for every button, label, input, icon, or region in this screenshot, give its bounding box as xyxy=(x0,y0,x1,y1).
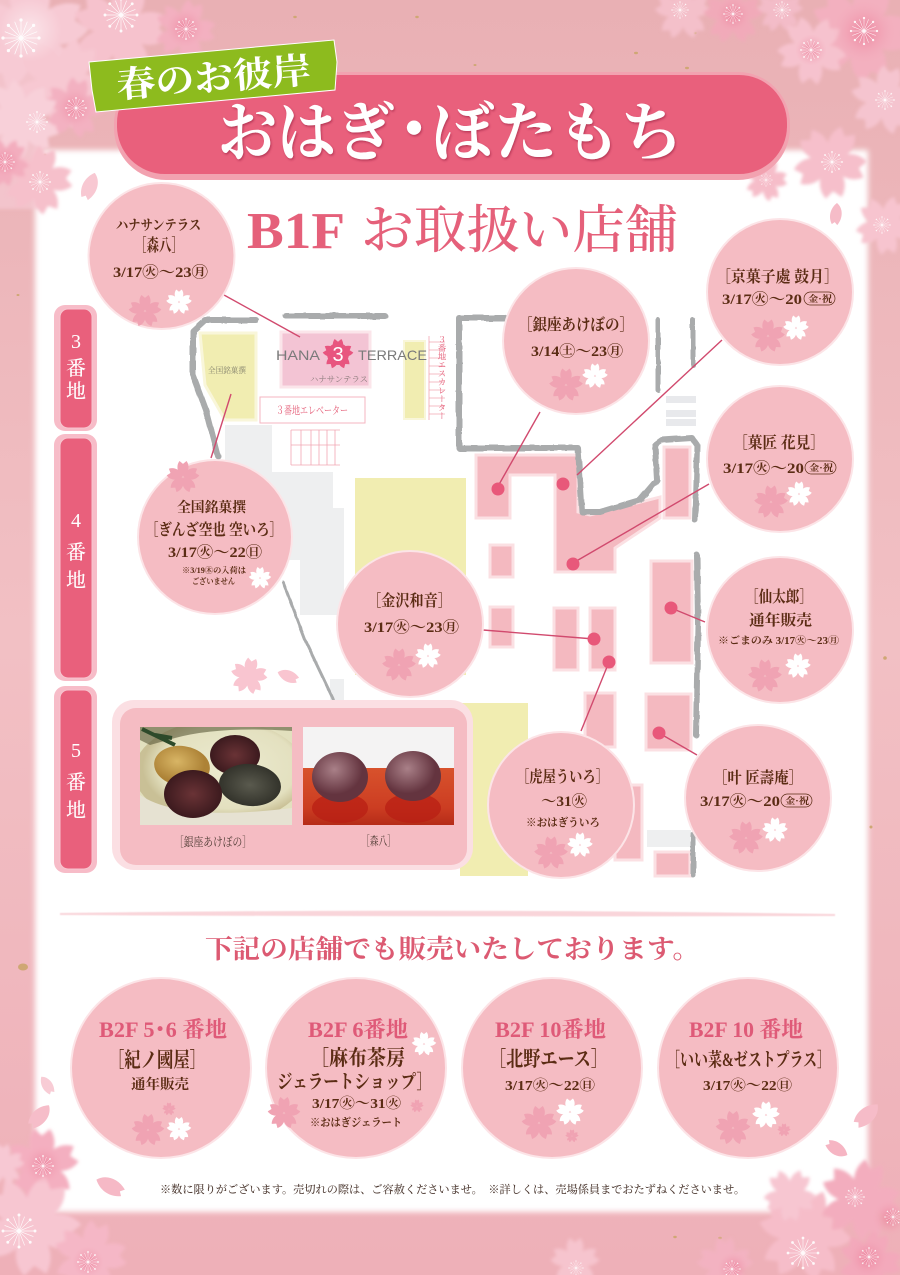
green tag: spring ohigan xyxy=(89,40,337,112)
store: Toraya Uiro xyxy=(487,731,635,879)
Hana Terrace logo xyxy=(276,339,427,384)
store: Sentaro: ［仙太郎］ xyxy=(745,588,813,606)
area tab: 5 banchi xyxy=(54,686,97,873)
footer note: ※数に限りがございます。売切れの際は、ご容赦くださいませ。 ※詳しくは、売場係員までおたずねくださいませ。 xyxy=(160,1182,745,1196)
photo: Moripachi ohagi xyxy=(303,727,454,825)
store: Ginza Akebono: 3/14㊏～23㊊ xyxy=(531,343,623,360)
area tab: 3 banchi: 番 xyxy=(66,357,86,380)
store: Azabu Saryo Gelato Shop: ジェラートショップ］ xyxy=(277,1071,432,1093)
store: Kasho Hanami: ［菓匠 花見］ xyxy=(733,433,825,452)
main title text: ぼたもち xyxy=(432,98,683,169)
store: Kitano Ace: 3/17㊋～22㊐ xyxy=(505,1078,595,1094)
store: Moripachi: ［森八］ xyxy=(134,235,184,255)
main title text xyxy=(218,95,683,169)
store: Kanazawa Wao: ［金沢和音］ xyxy=(367,591,452,610)
photo: Ginza Akebono ohagi xyxy=(140,727,292,825)
area tab: 3 banchi: 地 xyxy=(66,380,86,403)
store: Ginza Kuya Sorairo: ございません xyxy=(192,576,235,586)
store: Kano Shojuan: 金·祝 xyxy=(785,795,809,806)
bottom-right cherry blossom cluster xyxy=(550,1099,900,1275)
heading: B1F stores: お取扱い店舗 xyxy=(361,203,678,260)
store: Azabu Saryo Gelato Shop: ※おはぎジェラート xyxy=(310,1115,402,1129)
store: Moripachi: 3/17㊋～23㊊ xyxy=(113,264,208,281)
main title text: ・ xyxy=(382,95,446,166)
title banner xyxy=(114,72,790,180)
label: elevator xyxy=(260,397,365,423)
store: Sentaro: ※ごまのみ 3/17㊋～23㊊ xyxy=(718,635,839,647)
store: Kano Shojuan: ［叶 匠壽庵］ xyxy=(713,768,803,787)
store: Iina and Zest Plus: ［いい菜&ゼストプラス］ xyxy=(666,1049,831,1071)
store: Kasho Hanami: 金·祝 xyxy=(809,462,833,473)
store: Toraya Uiro: ～31㊋ xyxy=(541,793,587,810)
area tab: 3 banchi xyxy=(54,305,97,431)
store: Kinokuniya xyxy=(70,977,252,1159)
white content panel xyxy=(35,150,868,1212)
photo panel xyxy=(112,700,473,870)
petals on map xyxy=(227,655,300,697)
area tab: 3 banchi: 3 xyxy=(71,331,81,353)
store: Kinokuniya: B2F 5･6 番地 xyxy=(99,1017,227,1042)
store: Iina and Zest Plus: B2F 10 番地 xyxy=(689,1017,803,1042)
heading: also sold at: 下記の店舗でも販売いたしております。 xyxy=(205,935,700,964)
area tab: 4 banchi xyxy=(54,434,97,681)
store: Ginza Kuya Sorairo: ［ぎんざ空也 空いろ］ xyxy=(145,520,283,539)
area tab: 4 banchi: 地 xyxy=(66,569,86,592)
divider band xyxy=(60,911,835,916)
store: Iina and Zest Plus xyxy=(657,977,839,1159)
store: Ginza Akebono: ［銀座あけぼの］ xyxy=(518,315,634,334)
top-left cherry blossom cluster xyxy=(0,0,225,223)
store: Kyogashidokoro Tsuzumizuki: 3/17㊋～20 xyxy=(722,291,802,308)
Hana Terrace logo: ハナサンテラス xyxy=(310,375,368,384)
store: Iina and Zest Plus: 3/17㊋～22㊐ xyxy=(703,1078,792,1094)
store: Ginza Akebono xyxy=(502,267,650,415)
store: Kitano Ace xyxy=(461,977,643,1159)
store: Ginza Kuya Sorairo xyxy=(137,459,293,615)
store: Azabu Saryo Gelato Shop: 3/17㊋～31㊋ xyxy=(312,1096,401,1112)
store: Moripachi xyxy=(88,182,236,330)
store: Toraya Uiro: ※おはぎういろ xyxy=(526,815,600,829)
store: Ginza Kuya Sorairo: 全国銘菓撰 xyxy=(177,499,247,516)
label: zenkoku meika: 全国銘菓撰 xyxy=(208,365,246,375)
bottom-left cherry blossom cluster xyxy=(0,1074,136,1275)
label: escalator: ３番地エスカレーター xyxy=(437,335,447,420)
store: Azabu Saryo Gelato Shop xyxy=(265,977,447,1159)
store: Kitano Ace: B2F 10番地 xyxy=(495,1017,606,1042)
store: Sentaro xyxy=(706,556,854,704)
store: Kasho Hanami: 3/17㊋～20 xyxy=(723,460,804,477)
leader lines and store dots xyxy=(211,295,722,755)
store: Kyogashidokoro Tsuzumizuki: 金·祝 xyxy=(808,293,832,304)
store: Kyogashidokoro Tsuzumizuki: ［京菓子處 鼓月］ xyxy=(716,267,839,286)
caption: Moripachi: ［森八］ xyxy=(361,833,396,848)
store: Kinokuniya: 通年販売 xyxy=(131,1076,189,1093)
store: Ginza Kuya Sorairo: 3/17㊋～22㊐ xyxy=(168,544,262,561)
area tab: 4 banchi: 4 xyxy=(71,510,81,532)
store: Azabu Saryo Gelato Shop: ［麻布茶房 xyxy=(310,1046,405,1070)
green tag: spring ohigan: 春のお彼岸 xyxy=(115,50,313,106)
area tab: 5 banchi: 番 xyxy=(66,771,86,794)
area tab: 4 banchi: 番 xyxy=(66,541,86,564)
Hana Terrace logo: HANA xyxy=(276,347,321,363)
store: Toraya Uiro: ［虎屋ういろ］ xyxy=(516,767,609,786)
area tab: 5 banchi: 地 xyxy=(66,799,86,822)
top-right cherry blossom cluster xyxy=(654,0,900,266)
store: Kanazawa Wao xyxy=(336,550,484,698)
heading: B1F stores: B1F xyxy=(247,203,345,260)
Hana Terrace logo: 3 xyxy=(332,344,344,366)
caption: Ginza Akebono: ［銀座あけぼの］ xyxy=(174,835,252,849)
store: Sentaro: 通年販売 xyxy=(749,611,812,629)
main title text: おはぎ xyxy=(218,98,395,169)
store: Kasho Hanami xyxy=(706,385,854,533)
area tab: 5 banchi: 5 xyxy=(71,740,81,762)
store: Kinokuniya: ［紀ノ國屋］ xyxy=(108,1048,206,1072)
store: Kano Shojuan xyxy=(684,724,832,872)
store: Kyogashidokoro Tsuzumizuki xyxy=(706,218,854,366)
Hana Terrace logo: TERRACE xyxy=(358,347,427,363)
store: Kano Shojuan: 3/17㊋～20 xyxy=(700,793,780,810)
floor map xyxy=(193,316,698,876)
store: Azabu Saryo Gelato Shop: B2F 6番地 xyxy=(308,1017,408,1042)
store: Kitano Ace: ［北野エース］ xyxy=(489,1047,608,1071)
store: Kanazawa Wao: 3/17㊋～23㊊ xyxy=(364,619,459,636)
store: Ginza Kuya Sorairo: ※3/19㊍の入荷は xyxy=(182,565,246,575)
store: Moripachi: ハナサンテラス xyxy=(116,218,201,234)
label: elevator: ３番地エレベーター xyxy=(276,403,348,417)
